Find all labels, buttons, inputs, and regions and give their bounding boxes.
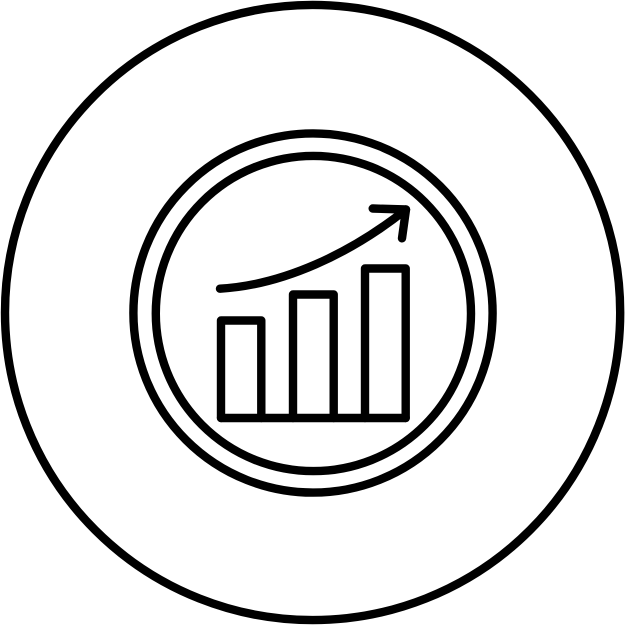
bar chart xyxy=(221,268,406,418)
bar 2 xyxy=(293,294,334,418)
bar 3 xyxy=(365,268,406,418)
arrow head xyxy=(373,208,406,238)
arrow curve xyxy=(220,210,406,289)
middle circle xyxy=(133,133,493,493)
inner circle xyxy=(156,156,471,471)
bar 1 xyxy=(221,320,261,418)
baseline xyxy=(221,414,406,422)
growth arrow xyxy=(220,208,406,289)
